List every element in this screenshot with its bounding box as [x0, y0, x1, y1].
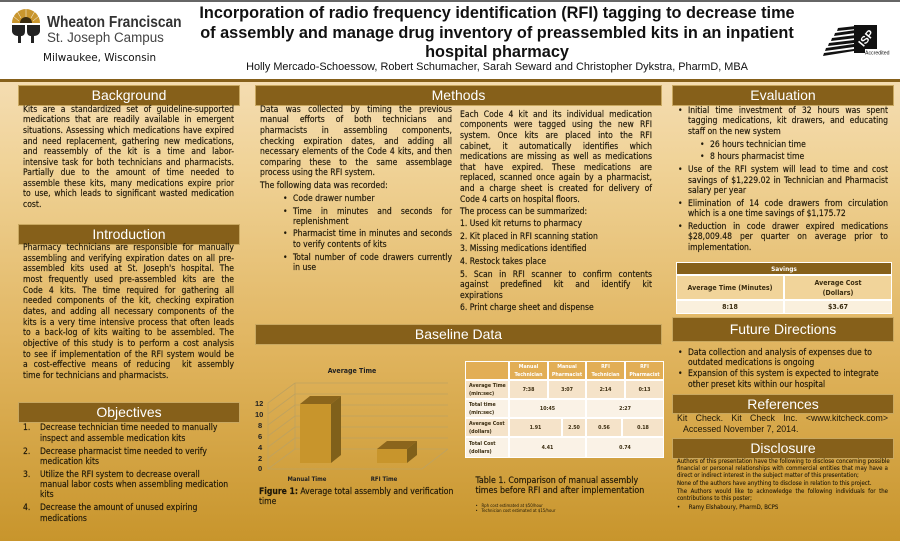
table: manual vs RFI comparison: RFI — [640, 364, 649, 370]
table: manual vs RFI comparison: 2:14 — [600, 386, 611, 392]
future directions list — [678, 348, 879, 390]
panel: disclosure heading — [672, 438, 894, 459]
objectives list: manual labor costs when assembling medication — [40, 480, 228, 490]
table: savings: $3.67 — [828, 303, 848, 311]
bar chart: average time: Manual Time — [288, 476, 327, 483]
panel: methods heading — [255, 85, 662, 106]
introduction text: needed components of the kit, checking expiration — [23, 296, 234, 306]
future directions list: outdated medications is ongoing — [688, 358, 814, 368]
table: manual vs RFI comparison — [465, 361, 664, 458]
bar chart: average time: 12 — [255, 399, 263, 408]
table: manual vs RFI comparison: 1.91 — [530, 424, 541, 430]
table: manual vs RFI comparison: RFI — [601, 364, 610, 370]
hospital logo — [12, 9, 182, 64]
objectives list: medications — [40, 514, 87, 524]
panel: objectives heading — [18, 402, 240, 423]
methods left column: process using the RFI system. — [260, 168, 375, 178]
methods left column: replenishment — [293, 217, 348, 227]
location: Milwaukee, Wisconsin — [43, 52, 156, 64]
background text — [23, 104, 234, 210]
evaluation list: implementation. — [688, 243, 751, 253]
panel: background heading: Background — [92, 87, 166, 103]
bar chart: average time: RFI Time — [371, 476, 398, 483]
icon: accreditation logo: Accredited — [865, 50, 890, 56]
evaluation list: 26 hours technician time — [710, 140, 806, 150]
evaluation list: Initial time investment of 32 hours was spent — [688, 106, 888, 116]
table: savings: Average Time (Minutes) — [688, 284, 772, 292]
bar: manual time — [300, 396, 341, 463]
table caption: Table 1. Comparison of manual assembly — [476, 476, 638, 486]
methods right column: 2. Kit placed in RFI scanning station — [460, 232, 598, 242]
evaluation list: which is a one time savings of $1,175.72 — [688, 209, 846, 219]
methods right column: medications are missing as well as medications — [460, 152, 652, 162]
methods right column — [460, 110, 652, 313]
figure caption — [259, 486, 453, 507]
panel: references heading: References — [747, 396, 819, 412]
methods left column: The following data was recorded: — [260, 181, 388, 191]
objectives list: 4. — [23, 503, 30, 513]
table: manual vs RFI comparison: Total Cost — [469, 440, 496, 446]
table footnotes — [476, 504, 556, 514]
panel: evaluation heading — [672, 85, 894, 106]
methods left column: necessary elements of the Code 4 kits, and then — [260, 147, 452, 157]
methods right column: that have expired. These medications are — [460, 163, 652, 173]
panel: disclosure heading: Disclosure — [750, 440, 816, 456]
objectives list: Utilize the RFI system to decrease overall — [40, 470, 200, 480]
bar chart: average time — [255, 367, 448, 483]
methods right column: The process can be summarized: — [460, 207, 587, 217]
methods left column: • — [283, 253, 288, 263]
introduction text: objective of this study is to perform a cost analysis — [23, 339, 234, 349]
methods right column: 4. Restock takes place — [460, 257, 546, 267]
introduction text: Pharmacy technicians are responsible for manually — [23, 243, 234, 253]
table footnotes: • Technician cost estimated at $15/hour — [476, 509, 555, 514]
title: hospital pharmacy — [425, 43, 569, 61]
introduction text: to see if implementation of the RFI system would be — [23, 350, 234, 360]
methods left column: to verify contents of kits — [293, 240, 387, 250]
table: manual vs RFI comparison: Manual — [519, 364, 538, 370]
methods left column: pharmacists in assembling components, — [260, 126, 452, 136]
bar chart: average time: 8 — [258, 421, 262, 430]
introduction text: assembling and verifying expiration dates on all pre- — [23, 254, 234, 264]
methods right column: 6. Print charge sheet and dispense — [460, 303, 594, 313]
methods left column: • — [283, 194, 288, 204]
table: manual vs RFI comparison: Pharmacist — [629, 372, 660, 378]
objectives list: medication kits — [40, 457, 99, 467]
disclosure text: direct or indirect interest in the subject matter of this presentation; — [677, 472, 859, 479]
panel: introduction heading — [18, 224, 240, 245]
methods left column: Code drawer number — [293, 194, 375, 204]
objectives list: Decrease pharmacist time needed to verify — [40, 447, 207, 457]
table: savings: Average Cost — [814, 278, 862, 286]
methods left column: checking expiration dates, and adding all — [260, 137, 452, 147]
references text — [677, 413, 888, 434]
introduction text: dates, and adding all necessary components of the — [23, 307, 234, 317]
future directions list: Expansion of this system is expected to integrate — [688, 369, 879, 379]
background text: and need replacement, gathering new medications, — [23, 137, 234, 147]
methods left column: Time in minutes and seconds for — [293, 207, 452, 217]
evaluation list: Elimination of 14 code drawers from circulation — [688, 199, 888, 209]
introduction text: a cost-effective means of reducing kit assembly — [23, 360, 234, 370]
introduction text: time for technicians and pharmacists. — [23, 371, 169, 381]
table: manual vs RFI comparison: Technician — [514, 372, 543, 378]
table: manual vs RFI comparison: 2:27 — [619, 406, 631, 412]
disclosure text: contributions to this poster; — [677, 495, 752, 502]
evaluation list: • — [678, 106, 683, 116]
disclosure text — [676, 458, 890, 511]
objectives list: 2. — [23, 447, 30, 457]
table: manual vs RFI comparison: 0.18 — [637, 424, 649, 430]
background text: Partially due to the amount of time needed to — [23, 168, 234, 178]
table: manual vs RFI comparison: 4.41 — [542, 444, 553, 450]
references text: Kit Check. Kit Check Inc. <www.kitcheck.com> — [677, 413, 888, 423]
panel: baseline data heading: Baseline Data — [415, 326, 502, 342]
background text: situations. Assessing which medications have expired — [23, 126, 234, 136]
table: savings: 8:18 — [722, 303, 738, 311]
table: manual vs RFI comparison: (min:sec) — [469, 410, 494, 416]
evaluation list: savings of $1,229.02 in Technician and Pharmacist — [688, 176, 888, 186]
table: manual vs RFI comparison: Average Time — [469, 382, 506, 388]
title — [199, 4, 795, 61]
background text: medications that are readily available in emergent — [23, 115, 234, 125]
bar chart: average time: 10 — [255, 410, 263, 419]
table footnotes: • Rph cost estimated at $50/hour — [476, 504, 543, 509]
header band — [0, 0, 900, 82]
evaluation list: salary per year — [688, 186, 746, 196]
objectives list: 1. — [23, 423, 30, 433]
table: savings: Savings — [771, 264, 797, 272]
methods right column: 1. Used kit returns to pharmacy — [460, 219, 582, 229]
objectives list: Decrease the amount of unused expiring — [40, 503, 197, 513]
table: manual vs RFI comparison: Total time — [469, 402, 496, 408]
bar chart: average time: 2 — [258, 454, 262, 463]
methods right column: Each Code 4 kit and its individual medication — [460, 110, 652, 120]
bar chart: average time: 0 — [258, 464, 262, 473]
objectives list: inspect and assemble medication kits — [40, 434, 185, 444]
background text: assemble these kits, many medications expire prior — [23, 179, 234, 189]
background text: intensive task for both technicians and pharmacists. — [23, 158, 234, 168]
icon: sun and columns — [12, 9, 40, 43]
methods left column — [260, 104, 452, 273]
methods right column: system. Once kits are placed into the RFI — [460, 131, 652, 141]
panel: evaluation heading: Evaluation — [750, 87, 816, 103]
bar chart: average time: 6 — [258, 432, 262, 441]
disclosure text: Authors of this presentation have the following to disclose concerning possible — [677, 458, 890, 465]
evaluation list: tagging medications, kit drawers, and educating — [688, 116, 888, 126]
evaluation list: 8 hours pharmacist time — [710, 152, 804, 162]
bar chart: average time: 4 — [258, 443, 263, 452]
campus text: St. Joseph Campus — [47, 30, 164, 45]
methods left column: Total number of code drawers currently — [293, 253, 452, 263]
introduction text: to a back-log of kits waiting to be assembled. The — [23, 328, 234, 338]
table: manual vs RFI comparison: Average Cost — [469, 420, 505, 426]
icon: accreditation logo — [823, 25, 890, 56]
methods right column: and a charge sheet is created for delivery of — [460, 184, 652, 194]
evaluation list: staff on the new system — [688, 127, 781, 137]
evaluation list: Use of the RFI system will lead to time and cost — [688, 165, 888, 175]
table: manual vs RFI comparison: 0.74 — [619, 444, 631, 450]
table: manual vs RFI comparison: (min:sec) — [469, 390, 494, 396]
background text: Kits are a standardized set of guideline-supported — [23, 105, 234, 115]
disclosure text: The Authors would like to acknowledge the following individuals for the — [677, 488, 888, 495]
title: Incorporation of radio frequency identification (RFI) tagging to decrease time — [199, 4, 795, 22]
future directions list: • — [678, 369, 683, 379]
methods right column: cabinet, it automatically identifies which — [460, 142, 652, 152]
methods right column: replaced, scanned once again by a pharmacist, — [460, 173, 652, 183]
future directions list: • — [678, 348, 683, 358]
table: manual vs RFI comparison: Technician — [591, 372, 620, 378]
methods right column: expirations — [460, 291, 503, 301]
evaluation list — [678, 106, 888, 253]
bar: RFI time — [377, 441, 417, 463]
methods left column: in use — [293, 263, 316, 273]
background text: to use, which leads to significant wasted medication — [23, 189, 234, 199]
table: manual vs RFI comparison: 7:38 — [523, 386, 534, 392]
panel: baseline data heading — [255, 324, 662, 345]
evaluation list: • — [700, 140, 705, 150]
icon: accreditation logo: ISP — [856, 28, 877, 49]
panel: references heading — [672, 394, 894, 414]
logo text: Wheaton Franciscan — [47, 14, 182, 31]
methods left column: comparing these to the same assemblage — [260, 158, 452, 168]
table: savings — [676, 262, 892, 314]
figure caption: Figure 1: Average total assembly and verification — [259, 487, 453, 497]
panel: future directions heading — [672, 317, 894, 342]
table: manual vs RFI comparison: 0:13 — [639, 386, 650, 392]
introduction text: Code 4 kits. The time required for gathering all — [23, 286, 234, 296]
evaluation list: • — [678, 199, 683, 209]
future directions list: other preset kits within our hospital — [688, 380, 825, 390]
methods right column: 5. Scan in RFI scanner to confirm contents — [460, 270, 652, 280]
objectives list: Decrease technician time needed to manually — [40, 423, 217, 433]
table: manual vs RFI comparison: Manual — [557, 364, 577, 370]
panel: future directions heading: Future Directions — [730, 321, 836, 337]
methods right column: 3. Missing medications identified — [460, 244, 586, 254]
table: manual vs RFI comparison: (dollars) — [469, 448, 492, 454]
methods left column: Pharmacist time in minutes and seconds — [293, 229, 452, 239]
table caption — [475, 476, 644, 496]
authors: Holly Mercado-Schoessow, Robert Schumacher, Sarah Seward and Christopher Dykstra, PharmD, MBA — [246, 61, 748, 73]
methods left column: • — [283, 229, 288, 239]
panel: objectives heading: Objectives — [96, 404, 162, 420]
methods right column: components were tagged using the new RFI — [460, 120, 652, 130]
table: manual vs RFI comparison: 10:45 — [540, 406, 555, 412]
table: manual vs RFI comparison: 2.50 — [568, 424, 580, 430]
panel: methods heading: Methods — [432, 87, 485, 103]
title: of assembly and manage drug inventory of preassembled kits in an inpatient — [200, 24, 794, 42]
disclosure text: • Ramy Elshaboury, PharmD, BCPS — [677, 504, 778, 511]
chart title: Average Time — [328, 367, 376, 375]
objectives list: kits — [40, 490, 54, 500]
methods left column: • — [283, 207, 288, 217]
introduction text — [23, 242, 234, 381]
table: manual vs RFI comparison: (dollars) — [469, 428, 492, 434]
evaluation list: • — [700, 152, 705, 162]
introduction text: kits is a very time intensive process that often leads — [23, 318, 234, 328]
methods right column: against predefined kit and identify kit — [460, 280, 652, 290]
background text: cost. — [23, 200, 41, 210]
background text: and reassembly of the kit is a time and labor- — [23, 147, 234, 157]
objectives list: 3. — [23, 470, 30, 480]
methods right column: Code 4 carts on hospital floors. — [460, 195, 580, 205]
methods left column: manual efforts of both technicians and — [260, 115, 452, 125]
evaluation list: • — [678, 165, 683, 175]
objectives list — [23, 422, 228, 524]
figure caption: time — [259, 497, 276, 507]
references text: Accessed November 7, 2014. — [683, 424, 798, 434]
panel: introduction heading: Introduction — [92, 226, 166, 242]
evaluation list: Reduction in code drawer expired medications — [688, 222, 888, 232]
methods left column: Data was collected by timing the previous — [260, 105, 452, 115]
panel: background heading — [18, 85, 240, 106]
table caption: times before RFI and after implementation — [476, 486, 644, 496]
table: manual vs RFI comparison: 3:07 — [561, 386, 573, 392]
introduction text: most frequently used pre-assembled kits are the — [23, 275, 234, 285]
evaluation list: • — [678, 222, 683, 232]
disclosure text: financial or personal relationships with commercial entities that may have a — [677, 465, 888, 472]
future directions list: Data collection and analysis of expenses due to — [688, 348, 872, 358]
table: manual vs RFI comparison: 0.56 — [598, 424, 610, 430]
evaluation list: $28,009.48 per quarter on average prior to — [688, 232, 888, 242]
introduction text: assembled kits used at St. Joseph's hospital. The — [23, 264, 234, 274]
disclosure text: None of the authors have anything to disclose in relation to this project. — [677, 480, 872, 487]
table: manual vs RFI comparison: Pharmacist — [552, 372, 582, 378]
table: savings: (Dollars) — [823, 288, 853, 296]
